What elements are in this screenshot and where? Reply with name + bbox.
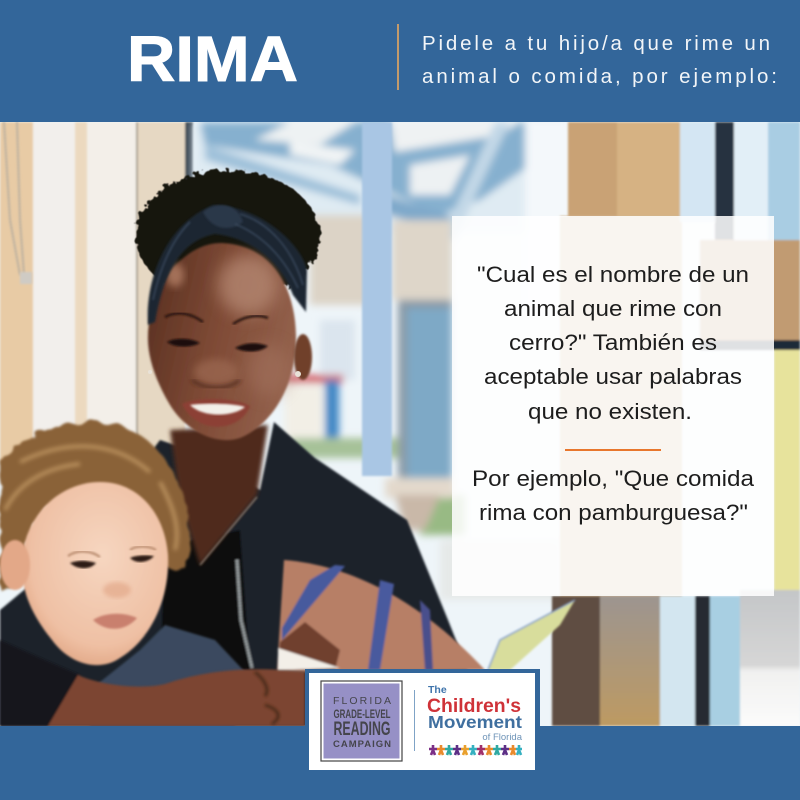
logo: The Children's Movement of Florida: The — [428, 684, 447, 696]
book — [277, 560, 575, 672]
child's shirt — [90, 625, 245, 726]
panel divider — [565, 449, 661, 451]
panel text: example: Por ejemplo, "Que comida — [472, 466, 755, 491]
logo: The Children's Movement of Florida: Movement — [428, 712, 522, 732]
panel text: rhyme question: animal que rime con — [504, 296, 722, 321]
panel text: rhyme question: aceptable usar palabras — [484, 364, 742, 389]
header divider — [397, 24, 399, 90]
panel text: rhyme question: "Cual es el nombre de un — [477, 262, 749, 287]
wood beams and right-hand window frames — [552, 122, 800, 726]
logo: Florida Grade-Level Reading Campaign: GRADE-LEVEL — [334, 707, 390, 721]
translucent text panel — [452, 216, 774, 596]
logo: Florida Grade-Level Reading Campaign: READING — [334, 719, 390, 740]
logo: The Children's Movement of Florida: Children's — [427, 696, 521, 717]
woman's hair — [136, 170, 320, 302]
logo: The Children's Movement of Florida — [427, 684, 523, 743]
child's face — [0, 482, 168, 665]
woman's neck — [170, 425, 268, 565]
logo: The Children's Movement of Florida: of Florida — [482, 732, 523, 743]
panel text: rhyme question: que no existen. — [528, 399, 692, 424]
logo: paper-doll children — [429, 745, 522, 755]
title: RIMA — [127, 23, 298, 95]
window post — [362, 122, 392, 476]
woman's face — [148, 243, 312, 440]
child's hair — [0, 422, 191, 590]
panel text: rhyme question — [477, 262, 749, 424]
woman's jacket — [0, 422, 490, 726]
blurred outdoor structure — [193, 122, 570, 600]
headband — [148, 205, 307, 325]
header instruction text: animal o comida, por ejemplo: — [422, 65, 777, 88]
smile — [182, 399, 250, 427]
logo: Florida Grade-Level Reading Campaign — [321, 681, 402, 761]
zipper — [237, 560, 252, 668]
header instruction text — [422, 32, 777, 88]
footer band — [0, 726, 800, 800]
chain — [4, 122, 24, 275]
logo divider — [414, 690, 415, 751]
woman's arm and sleeve — [0, 640, 305, 726]
panel text: rhyme question: cerro?" También es — [509, 330, 717, 355]
header band — [0, 0, 800, 122]
header instruction text: Pidele a tu hijo/a que rime un — [422, 32, 770, 55]
logo: Florida Grade-Level Reading Campaign: CAMPAIGN — [333, 739, 391, 750]
panel text: example — [472, 466, 755, 525]
window and wall background — [0, 122, 800, 726]
logo: Florida Grade-Level Reading Campaign: FLORIDA — [333, 695, 391, 707]
logo box — [305, 669, 540, 774]
panel text: example: rima con pamburguesa?" — [479, 500, 748, 525]
photo: mother and child reading — [0, 122, 800, 726]
